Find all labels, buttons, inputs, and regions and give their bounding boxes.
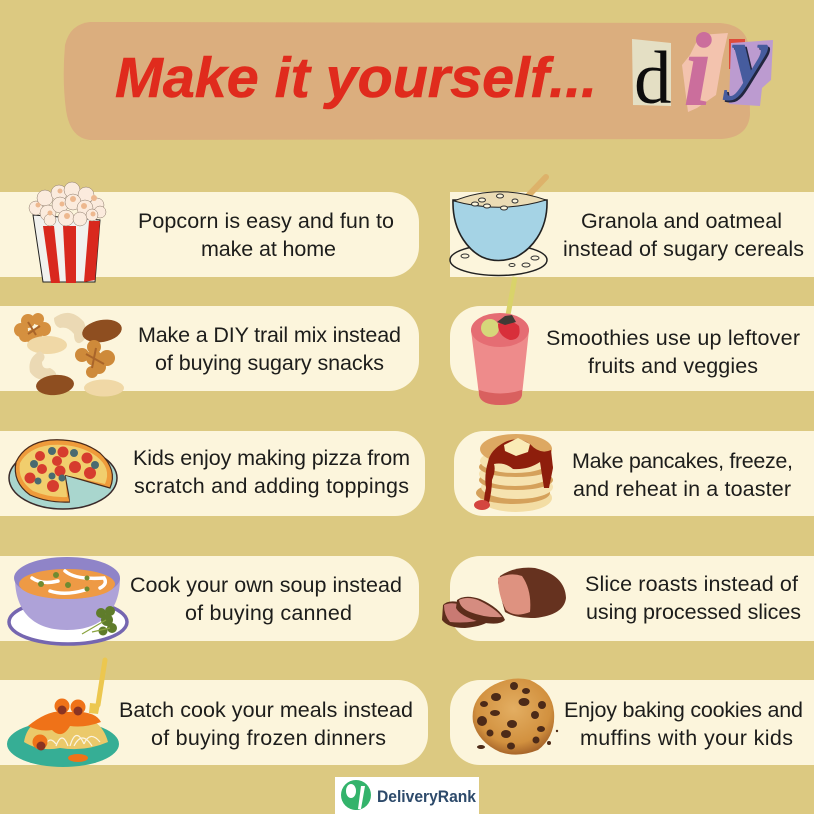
pill	[0, 431, 425, 516]
text: Popcorn is easy and fun to	[138, 209, 394, 233]
text: Granola and oatmeal	[581, 209, 782, 233]
header banner	[64, 9, 773, 140]
icon: nuts	[14, 313, 124, 397]
icon: sliced roast	[442, 568, 566, 628]
icon: DIY cut-out letters	[632, 9, 773, 128]
pill	[454, 431, 814, 516]
panel: granola	[450, 177, 814, 277]
text: Make a DIY trail mix instead	[138, 323, 401, 347]
icon: cookie	[473, 679, 558, 755]
icon: smoothie glass	[471, 277, 529, 405]
pill	[450, 192, 814, 277]
text: and reheat in a toaster	[573, 477, 791, 501]
text: scratch and adding toppings	[134, 474, 409, 498]
text	[119, 698, 413, 750]
text: Enjoy baking cookies and	[564, 698, 803, 722]
panel: pizza	[0, 431, 425, 516]
text	[564, 698, 803, 750]
text	[130, 573, 402, 625]
text	[572, 449, 793, 501]
icon: pancake stack	[474, 434, 553, 512]
text	[138, 209, 394, 261]
pill	[450, 556, 814, 641]
text: muffins with your kids	[580, 726, 793, 750]
title: Make it yourself...	[115, 46, 597, 110]
text: of buying canned	[185, 601, 352, 625]
wordmark: DeliveryRank	[377, 787, 476, 806]
pill	[450, 680, 814, 765]
pill	[0, 192, 419, 277]
text	[138, 323, 401, 375]
icon: DIY cut-out letters: y	[724, 11, 771, 103]
header background	[64, 22, 750, 140]
icon: DIY cut-out letters: y	[722, 9, 769, 101]
text: make at home	[201, 237, 336, 261]
icon: cereal bowl	[450, 177, 547, 276]
icon: spaghetti	[7, 660, 119, 767]
text: Smoothies use up leftover	[546, 326, 800, 350]
pill	[0, 556, 419, 641]
panel: batch cook	[0, 660, 428, 767]
text: Kids enjoy making pizza from	[133, 446, 410, 470]
text	[563, 209, 804, 261]
text	[133, 446, 410, 498]
text: Batch cook your meals instead	[119, 698, 413, 722]
panel: popcorn	[0, 182, 419, 283]
text: Make pancakes, freeze,	[572, 449, 793, 473]
icon: fork and spoon circle	[341, 780, 371, 810]
panel: trail mix	[0, 306, 419, 397]
icon: popcorn bucket	[29, 182, 106, 283]
text: Slice roasts instead of	[585, 572, 798, 596]
text	[585, 572, 801, 624]
pill	[450, 306, 814, 391]
text: of buying sugary snacks	[155, 351, 384, 375]
icon: pizza	[9, 440, 117, 509]
icon: soup bowl	[9, 557, 127, 644]
panel: soup	[0, 556, 419, 644]
panel: smoothie	[450, 277, 814, 405]
pill	[0, 306, 419, 391]
logo: DeliveryRank	[335, 777, 479, 814]
text: fruits and veggies	[588, 354, 758, 378]
icon: DIY cut-out letters: d	[634, 37, 672, 120]
panel: cookies	[450, 679, 814, 765]
text	[546, 326, 800, 378]
panel: pancakes	[454, 431, 814, 516]
text: of buying frozen dinners	[151, 726, 386, 750]
text: instead of sugary cereals	[563, 237, 804, 261]
text: Cook your own soup instead	[130, 573, 402, 597]
pill	[0, 680, 428, 765]
text: using processed slices	[586, 600, 801, 624]
icon: DIY cut-out letters: i	[683, 11, 712, 128]
panel: roast	[442, 556, 814, 641]
